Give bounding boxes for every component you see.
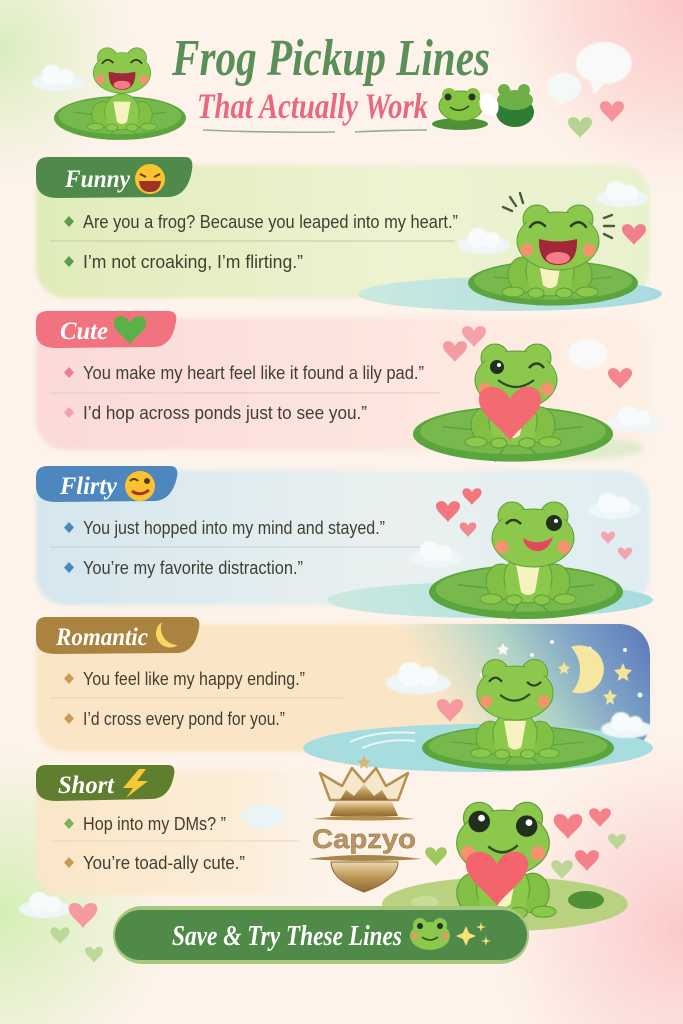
illustration: night frog <box>303 640 653 772</box>
line 2: I’d hop across ponds just to see you.” <box>83 403 367 423</box>
icon: frog face <box>410 918 450 950</box>
logo: Capzyo crown and shield <box>308 755 422 892</box>
illustration: frog hugging heart <box>413 326 660 462</box>
line 1: You make my heart feel like it found a lily pad.” <box>83 363 424 383</box>
tab: Funny <box>36 157 192 198</box>
tab: Cute: Cute <box>60 318 108 345</box>
line 2: You’re my favorite distraction.” <box>83 558 303 578</box>
panel background <box>36 318 650 450</box>
tab: Romantic <box>36 617 199 654</box>
tab: Short <box>36 765 174 801</box>
icon: frog on lily pad <box>54 48 186 140</box>
illustration: winking frog <box>327 488 653 619</box>
panel: short <box>36 765 336 895</box>
crescent <box>571 645 604 693</box>
panel background <box>36 165 650 298</box>
line 1: You feel like my happy ending.” <box>83 669 305 689</box>
icon: crescent moon <box>156 622 178 648</box>
panel background <box>36 770 336 895</box>
brand name: Capzyo <box>312 824 416 854</box>
illustration: laughing frog <box>358 181 662 311</box>
panel: funny <box>36 157 662 311</box>
icon: sparkles <box>456 922 491 946</box>
tab: Cute <box>36 311 176 348</box>
icon: laughing emoji <box>135 164 165 194</box>
subtitle: That Actually Work <box>197 86 428 126</box>
line 1: Hop into my DMs? ” <box>83 814 226 834</box>
decorations bottom left <box>19 892 103 962</box>
tab: Romantic: Romantic <box>55 624 148 651</box>
hearts top right <box>568 101 624 138</box>
line 1: You just hopped into my mind and stayed.” <box>83 518 385 538</box>
subtitle underline <box>203 130 427 132</box>
icon: two small frogs <box>432 84 534 130</box>
line 2: I’d cross every pond for you.” <box>83 709 285 729</box>
title: Frog Pickup Lines <box>171 30 490 87</box>
icon: lightning <box>123 769 148 798</box>
icon: green heart <box>114 316 146 344</box>
illustration: frog with big heart <box>382 802 628 931</box>
cloud left of header <box>32 65 84 91</box>
speech bubble <box>241 804 285 833</box>
icon: winking emoji <box>125 471 155 501</box>
panel: flirty <box>36 466 653 619</box>
tab: Flirty: Flirty <box>59 473 118 500</box>
panel background <box>36 624 650 752</box>
tab: Funny: Funny <box>64 166 131 193</box>
panel background <box>36 470 650 605</box>
tab: Short: Short <box>58 772 115 799</box>
cta label: Save & Try These Lines <box>172 920 402 952</box>
panel: cute <box>36 311 660 462</box>
line 2: I’m not croaking, I’m flirting.” <box>83 252 303 272</box>
tab: Flirty <box>36 466 177 502</box>
speech bubbles <box>547 42 632 106</box>
line 1: Are you a frog? Because you leaped into my heart.” <box>83 212 458 232</box>
line 2: You’re toad-ally cute.” <box>83 853 245 873</box>
call to action <box>113 906 529 964</box>
panel: romantic <box>36 617 653 772</box>
header <box>32 30 632 140</box>
